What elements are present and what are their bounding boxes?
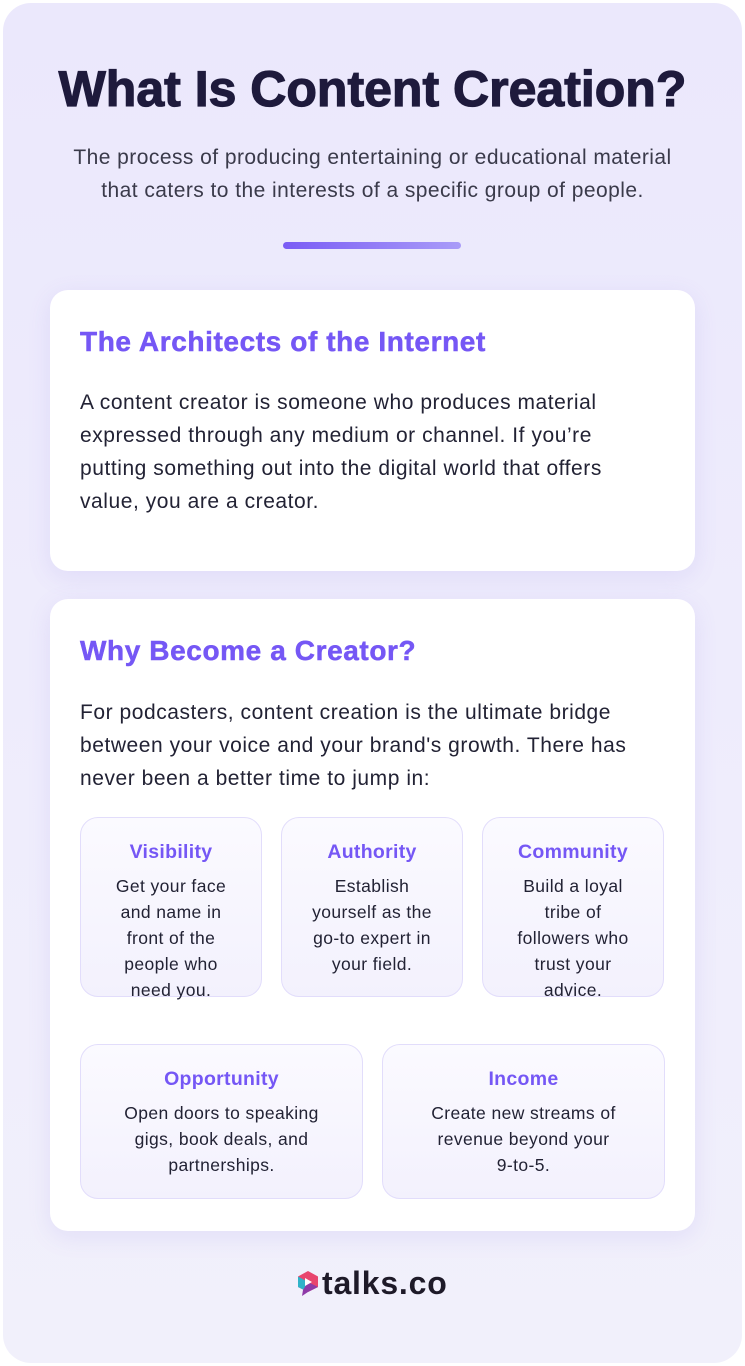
card: visibility: Visibility	[130, 841, 212, 863]
card: visibility: Get your face	[116, 876, 226, 896]
text: architects: expressed through any medium or channel. If you’re	[80, 424, 592, 447]
text: why: between your voice and your brand's growth. There has	[80, 734, 626, 757]
text: brand: talks.co	[322, 1265, 448, 1301]
card: community: advice.	[544, 980, 602, 1000]
card: income: 9-to-5.	[497, 1155, 550, 1175]
card: community: Community	[518, 841, 628, 863]
card: authority: go-to expert in	[313, 928, 431, 948]
text: architects: value, you are a creator.	[80, 490, 319, 513]
card: opportunity: partnerships.	[168, 1155, 275, 1175]
card: community: tribe of	[545, 902, 601, 922]
card: income	[382, 1044, 665, 1199]
divider bar	[283, 242, 461, 249]
card: opportunity: Open doors to speaking	[124, 1103, 319, 1123]
card: community	[482, 817, 664, 997]
text: architects: A content creator is someone who produces material	[80, 391, 597, 414]
text: why: never been a better time to jump in:	[80, 767, 430, 790]
card: visibility: and name in	[121, 902, 221, 922]
card: opportunity	[80, 1044, 363, 1199]
subtitle: The process of producing entertaining or educational material	[73, 146, 672, 169]
card: community: trust your	[535, 954, 611, 974]
panel: architects	[50, 290, 695, 571]
subtitle	[73, 146, 672, 202]
card: income: Create new streams of	[431, 1103, 616, 1123]
card: community: Build a loyal	[523, 876, 623, 896]
card: income: revenue beyond your	[437, 1129, 610, 1149]
card: visibility: people who	[124, 954, 218, 974]
card: authority: your field.	[332, 954, 412, 974]
card: authority: Establish	[335, 876, 409, 896]
icon: talks logo	[298, 1271, 318, 1296]
panel: why become a creator	[50, 599, 695, 1231]
text: why: For podcasters, content creation is the ultimate bridge	[80, 701, 611, 724]
card: income: Income	[488, 1068, 559, 1090]
heading: architects: The Architects of the Internet	[80, 326, 486, 357]
subtitle: that caters to the interests of a specific group of people.	[101, 179, 644, 202]
text: architects: putting something out into the digital world that offers	[80, 457, 602, 480]
card: authority	[281, 817, 463, 997]
card: opportunity: gigs, book deals, and	[135, 1129, 308, 1149]
logo	[298, 1265, 448, 1301]
text: architects	[80, 391, 602, 513]
card: visibility: front of the	[127, 928, 215, 948]
card: authority: Authority	[327, 841, 417, 863]
heading: why: Why Become a Creator?	[80, 635, 416, 666]
title: What Is Content Creation?	[59, 61, 686, 117]
card: community: followers who	[517, 928, 629, 948]
card: visibility: need you.	[131, 980, 211, 1000]
card: authority: yourself as the	[312, 902, 432, 922]
card: opportunity: Opportunity	[164, 1068, 279, 1090]
card: visibility	[80, 817, 262, 997]
text: why	[80, 701, 626, 790]
